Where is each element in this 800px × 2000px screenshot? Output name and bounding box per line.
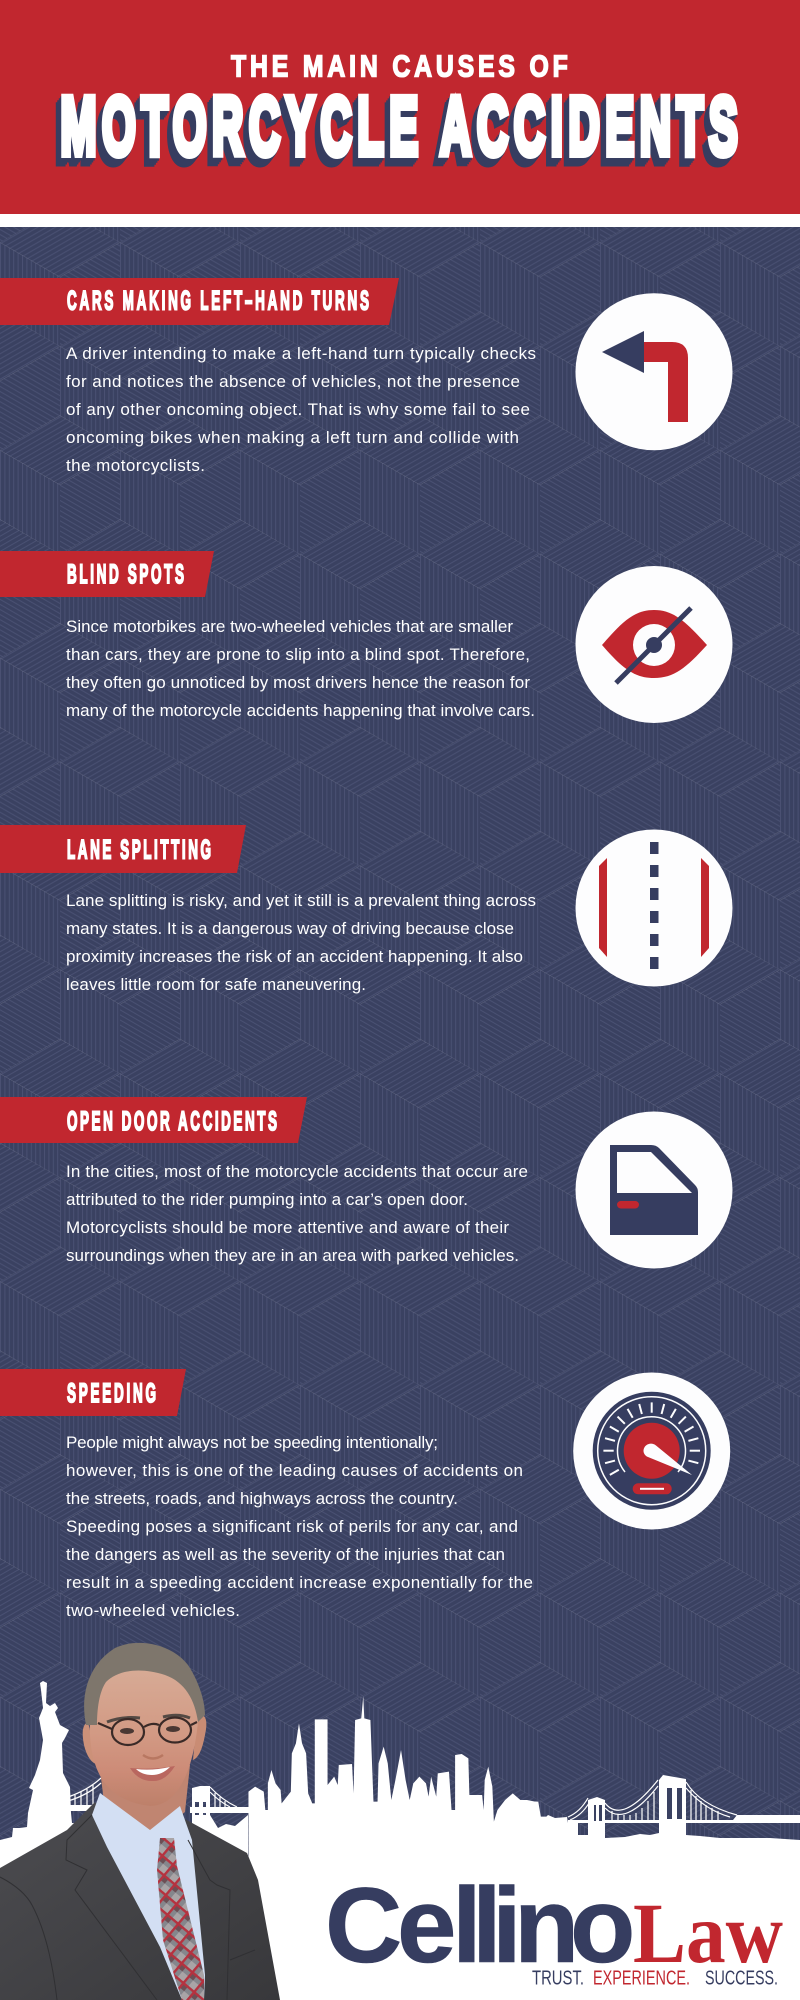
jacket lapels and seams <box>0 1815 255 2000</box>
body text: Speeding poses a significant risk of perils for any car, and <box>66 1517 518 1536</box>
suit jacket <box>0 1802 280 2000</box>
eyebrows <box>107 1715 190 1722</box>
body text: the dangers as well as the severity of the injuries that can <box>66 1545 505 1564</box>
body text: In the cities, most of the motorcycle accidents that occur are <box>66 1162 528 1181</box>
body text: leaves little room for safe maneuvering. <box>66 975 366 994</box>
brooklyn bridge <box>568 1775 800 1834</box>
panel: open door accidents <box>0 1097 732 1268</box>
body text <box>66 891 536 994</box>
heading banner: LANE SPLITTING <box>67 834 211 865</box>
body text: than cars, they are prone to slip into a blind spot. Therefore, <box>66 645 530 664</box>
panel: blind spots <box>0 551 732 723</box>
heading banner <box>0 278 399 325</box>
title line: motorcycle accidents: MOTORCYCLE ACCIDENTS <box>56 87 734 178</box>
heading banner: BLIND SPOTS <box>67 559 184 589</box>
necktie <box>157 1838 204 2000</box>
logo: cellino law: Cellino <box>325 1865 635 1985</box>
eyes <box>120 1726 180 1734</box>
hair <box>84 1643 205 1725</box>
body text: attributed to the rider pumping into a car’s open door. <box>66 1190 468 1209</box>
shirt <box>92 1793 205 2000</box>
body text: People might always not be speeding intentionally; <box>66 1433 438 1452</box>
panel: speeding <box>0 1369 730 1620</box>
neck <box>100 1765 190 1840</box>
title line: motorcycle accidents: MOTORCYCLE ACCIDENTS <box>58 85 735 176</box>
icon: crossed-out eye <box>576 566 732 723</box>
icon: speedometer <box>573 1372 730 1530</box>
body text: oncoming bikes when making a left turn and collide with <box>66 428 519 447</box>
manhattan towers <box>248 1696 548 2000</box>
heading banner <box>0 1097 307 1143</box>
face <box>90 1660 199 1806</box>
panel: cars making left-hand turns <box>0 278 732 475</box>
header banner <box>0 0 800 214</box>
statue of liberty and left shore <box>0 1681 248 2000</box>
body text: surroundings when they are in an area with parked vehicles. <box>66 1246 519 1265</box>
eyeglasses <box>98 1718 197 1745</box>
body text: Motorcyclists should be more attentive and aware of their <box>66 1218 509 1237</box>
body text <box>66 1433 533 1620</box>
body text <box>66 617 535 720</box>
ears <box>83 1722 98 1765</box>
body text: Lane splitting is risky, and yet it still is a prevalent thing across <box>66 891 536 910</box>
body text: however, this is one of the leading causes of accidents on <box>66 1461 523 1480</box>
tagline <box>532 1968 778 1990</box>
title line: motorcycle accidents: MOTORCYCLE ACCIDENTS <box>55 89 732 180</box>
white divider band <box>0 214 800 227</box>
body text: for and notices the absence of vehicles, not the presence <box>66 372 520 391</box>
body text: the streets, roads, and highways across the country. <box>66 1489 458 1508</box>
left bridge <box>68 1778 250 1815</box>
heading banner: OPEN DOOR ACCIDENTS <box>67 1106 277 1136</box>
logo: cellino law <box>325 1865 783 1990</box>
icon: left turn arrow <box>576 293 732 450</box>
heading banner: SPEEDING <box>67 1378 156 1408</box>
body text: Since motorbikes are two-wheeled vehicles that are smaller <box>66 617 513 636</box>
body text <box>66 344 536 475</box>
title line: the main causes of: THE MAIN CAUSES OF <box>231 49 568 83</box>
smile <box>130 1766 175 1781</box>
heading banner <box>0 551 214 597</box>
head <box>83 1643 206 1806</box>
panel: lane splitting <box>0 825 732 994</box>
city skyline silhouette <box>0 1681 800 2000</box>
body text <box>66 1162 528 1265</box>
body text: many of the motorcycle accidents happening that involve cars. <box>66 701 535 720</box>
tagline: TRUST. <box>532 1968 584 1990</box>
body text: the motorcyclists. <box>66 456 205 475</box>
right shore <box>520 1800 800 2000</box>
title line: motorcycle accidents: MOTORCYCLE ACCIDENTS <box>60 80 738 172</box>
attorney portrait <box>0 1643 280 2000</box>
heading banner <box>0 825 246 873</box>
nose shadow <box>143 1755 163 1758</box>
heading banner <box>0 1369 186 1416</box>
body text: A driver intending to make a left-hand turn typically checks <box>66 344 536 363</box>
title line: motorcycle accidents: MOTORCYCLE ACCIDENTS <box>60 83 737 174</box>
icon: road lanes <box>576 830 732 986</box>
tagline: EXPERIENCE. <box>593 1968 690 1990</box>
icon: car door <box>576 1112 732 1268</box>
body text: of any other oncoming object. That is why some fail to see <box>66 400 530 419</box>
body text: many states. It is a dangerous way of driving because close <box>66 919 514 938</box>
heading banner: CARS MAKING LEFT–HAND TURNS <box>67 285 369 316</box>
logo: cellino law: Law <box>633 1885 783 1981</box>
body text: they often go unnoticed by most drivers hence the reason for <box>66 673 530 692</box>
body text: proximity increases the risk of an accident happening. It also <box>66 947 523 966</box>
body text: two-wheeled vehicles. <box>66 1601 240 1620</box>
body text: result in a speeding accident increase exponentially for the <box>66 1573 533 1592</box>
